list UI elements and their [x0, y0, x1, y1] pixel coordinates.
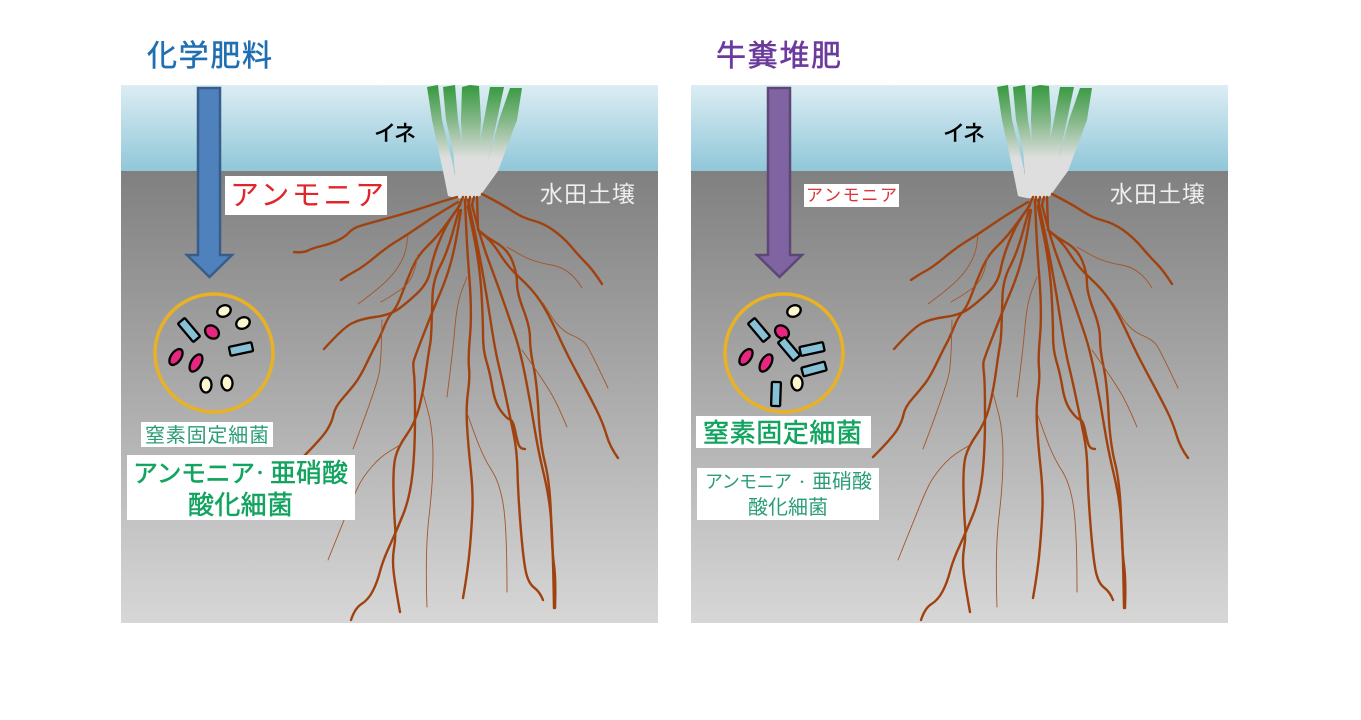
bacteria circle — [155, 294, 273, 412]
label: ammonia and nitrite oxidizing bacteria: アンモニア — [705, 472, 792, 492]
label: ammonia and nitrite oxidizing bacteria: 酸化細菌 — [748, 496, 828, 519]
label: ammonia: アンモニア — [806, 186, 897, 205]
label: ammonia and nitrite oxidizing bacteria: ・ — [796, 475, 808, 489]
rice plant leaves — [997, 85, 1092, 198]
label: paddy soil: 水田土壌 — [1110, 181, 1205, 207]
label: ammonia and nitrite oxidizing bacteria: 酸化細菌 — [188, 490, 293, 520]
rice roots — [873, 194, 1188, 620]
paddy soil layer — [121, 171, 658, 623]
label: ammonia and nitrite oxidizing bacteria — [697, 468, 879, 520]
label: nitrogen-fixing bacteria: 窒素固定細菌 — [145, 424, 269, 447]
rice plant leaves — [427, 85, 522, 198]
label: ammonia and nitrite oxidizing bacteria: 亜硝酸 — [812, 470, 872, 493]
paddy soil layer — [691, 171, 1228, 623]
arrow: compost input — [757, 88, 802, 277]
label: ammonia and nitrite oxidizing bacteria: 亜硝酸 — [270, 458, 348, 488]
label: ammonia and nitrite oxidizing bacteria: ・ — [253, 465, 267, 481]
bacteria circle — [725, 294, 843, 412]
label: rice: イネ — [374, 121, 416, 146]
label: ammonia: アンモニア — [230, 180, 384, 212]
rice roots — [294, 194, 618, 620]
panel: chemical fertilizer — [121, 85, 658, 623]
water layer — [691, 85, 1228, 171]
title: cow manure compost: 牛糞堆肥 — [716, 40, 841, 73]
arrow: chemical fertilizer input — [187, 88, 232, 277]
label: nitrogen-fixing bacteria: 窒素固定細菌 — [703, 418, 862, 448]
label: rice: イネ — [943, 121, 985, 146]
label: ammonia and nitrite oxidizing bacteria — [127, 455, 355, 520]
label: ammonia and nitrite oxidizing bacteria: アンモニア — [133, 460, 255, 488]
panel: cow manure compost — [691, 85, 1228, 623]
water layer — [121, 85, 658, 171]
label: paddy soil: 水田土壌 — [540, 181, 635, 207]
title: chemical fertilizer: 化学肥料 — [147, 40, 272, 73]
